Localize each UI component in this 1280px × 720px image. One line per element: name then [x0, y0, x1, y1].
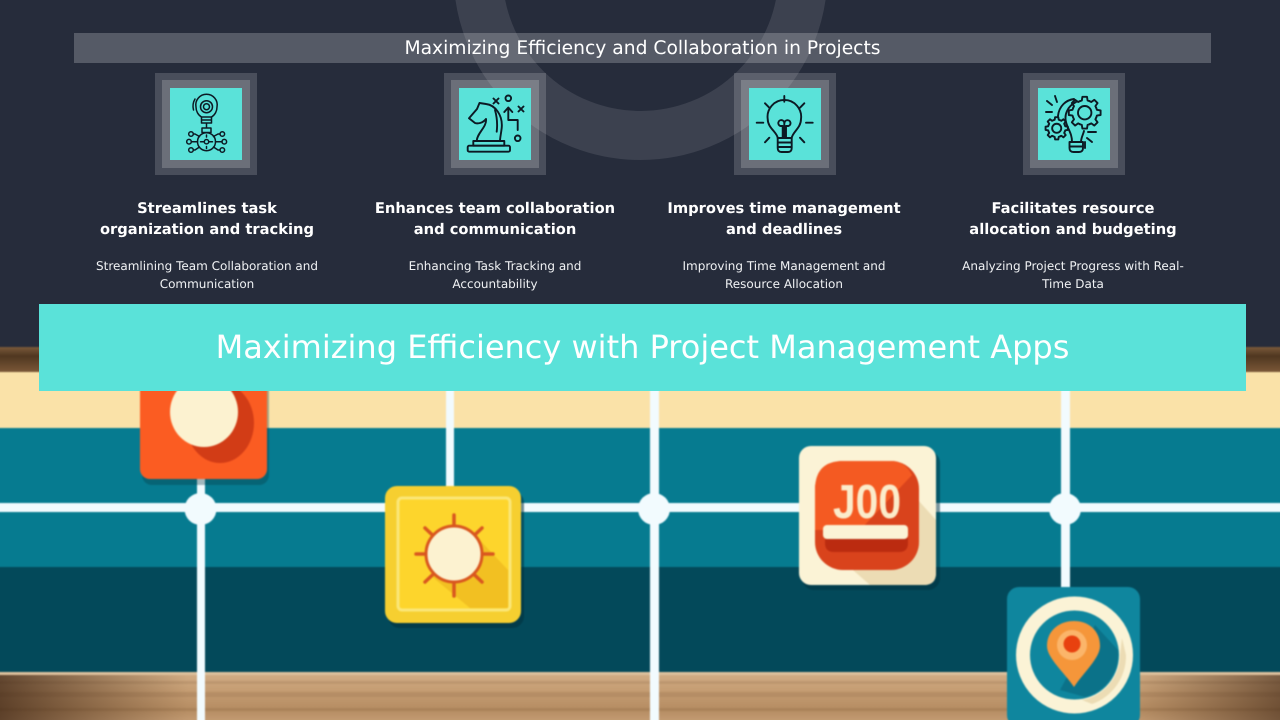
- column 1 description: [96, 259, 318, 291]
- decorative ring behind header: [456, 0, 826, 160]
- column 1 heading: [100, 200, 314, 238]
- icon: cream app tile with 100 badge: [799, 446, 940, 590]
- column 4 heading: Facilitates resource: [991, 200, 1155, 216]
- column 1 description: Communication: [160, 277, 254, 291]
- column 1 heading: organization and tracking: [100, 220, 314, 238]
- column 4 heading: allocation and budgeting: [969, 220, 1177, 238]
- grid lines: [0, 372, 1280, 720]
- column 2 description: Enhancing Task Tracking and: [409, 259, 581, 273]
- column 3 description: [683, 259, 885, 291]
- column 2 description: [409, 259, 581, 291]
- icon: light bulb with rays: [734, 73, 836, 175]
- icon: chess knight strategy: [444, 73, 546, 175]
- column 2 heading: Enhances team collaboration: [375, 200, 615, 216]
- title banner: Maximizing Efficiency with Project Management Apps: [216, 328, 1069, 366]
- header bar: Maximizing Efficiency and Collaboration in Projects: [404, 38, 881, 59]
- column 4 description: [962, 259, 1184, 291]
- icon: lightbulb with circuit: [155, 73, 257, 175]
- column 3 description: Resource Allocation: [725, 277, 843, 291]
- column 2 description: Accountability: [452, 277, 538, 291]
- column 3 heading: and deadlines: [726, 220, 842, 238]
- icon: teal map pin app tile: [1007, 587, 1140, 720]
- column 2 heading: and communication: [414, 220, 576, 238]
- background photo: app icons on a grid: [0, 346, 1280, 720]
- column 1 heading: Streamlines task: [137, 200, 277, 216]
- column 2 heading: [375, 200, 615, 238]
- column 4 description: Time Data: [1042, 277, 1104, 291]
- icon: cream app tile with 100 badge: J00: [833, 476, 901, 529]
- column 1 description: Streamlining Team Collaboration and: [96, 259, 318, 273]
- column 3 description: Improving Time Management and: [683, 259, 885, 273]
- icon: yellow sun app tile: [385, 486, 524, 628]
- icon: orange app tile: [140, 365, 269, 485]
- icon: head with gears: [1023, 73, 1125, 175]
- header bar: [74, 33, 1211, 63]
- column 4 description: Analyzing Project Progress with Real-: [962, 259, 1184, 273]
- column 3 heading: Improves time management: [667, 200, 901, 216]
- column 3 heading: [667, 200, 901, 238]
- column 4 heading: [969, 200, 1177, 238]
- title banner: [39, 304, 1246, 391]
